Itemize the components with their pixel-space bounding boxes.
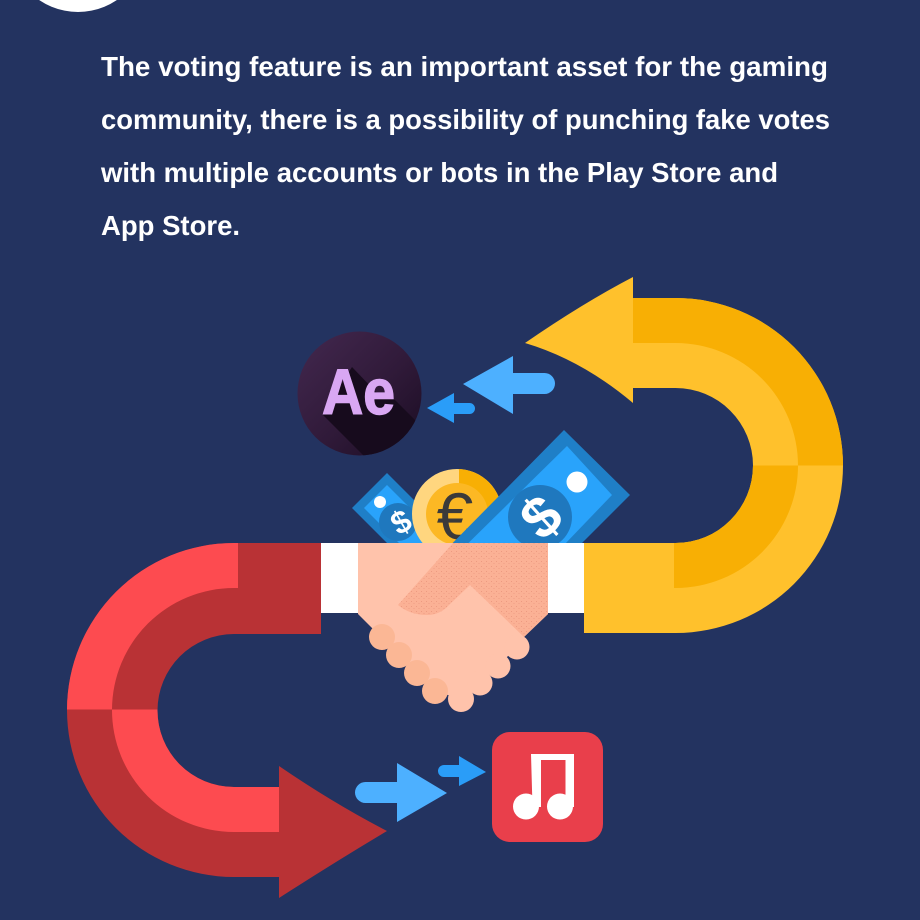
body text paragraph: with multiple accounts or bots in the Play Store and: [100, 157, 778, 188]
icon: music note tile: [492, 732, 603, 842]
body text paragraph: The voting feature is an important asset for the gaming: [101, 51, 828, 82]
euro coin: €: [437, 479, 473, 553]
right forearm shade: [398, 543, 548, 637]
right cuff: [548, 543, 584, 613]
euro coin: [412, 469, 498, 543]
clasped hands base: [358, 543, 548, 699]
long shadow of letters: [322, 367, 416, 456]
large banknote: [452, 430, 630, 543]
right-side fingers: [448, 634, 530, 712]
small banknote: [352, 473, 422, 543]
arrow: large blue pointing to music tile: [355, 763, 447, 822]
body text paragraph: App Store.: [101, 210, 240, 241]
white circle cropped at top edge: [9, 0, 147, 12]
left cuff: [321, 543, 358, 613]
body text paragraph: [100, 51, 830, 241]
music note glyph: [513, 754, 574, 820]
large banknote: $: [508, 482, 575, 552]
icon: After Effects badge: [298, 332, 422, 456]
money group: [352, 430, 630, 543]
red curved arrow: [67, 543, 387, 898]
Ae lettering: Ae: [322, 356, 395, 428]
yellow curved arrow: [525, 277, 843, 633]
handshake: [321, 543, 584, 712]
left-side fingers: [369, 624, 448, 704]
body text paragraph: community, there is a possibility of punching fake votes: [101, 104, 830, 135]
arrow: small blue pointing to music tile: [438, 756, 486, 786]
arrow: large blue pointing to Ae: [463, 356, 555, 414]
small banknote: $: [384, 502, 418, 542]
arrow: small blue pointing to Ae: [427, 393, 475, 423]
